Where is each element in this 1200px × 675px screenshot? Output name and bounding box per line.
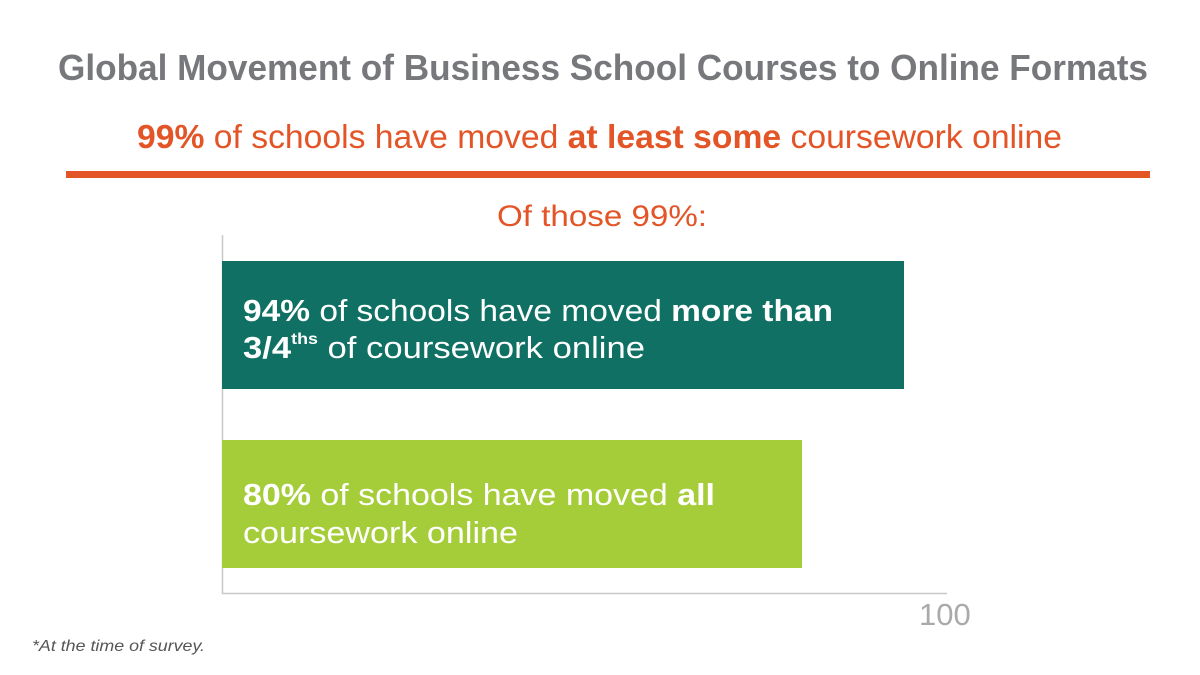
subheading: Of those 99%: [497, 200, 707, 233]
bar: 80%: coursework online [243, 515, 518, 550]
bar: 94%: 3/4 [243, 330, 292, 365]
bar chart [222, 235, 971, 632]
bar: 94% [222, 261, 904, 389]
axis label: 100 [919, 597, 971, 632]
orange divider [66, 171, 1150, 178]
bar: 94%: 94% of schools have moved more than [243, 293, 833, 328]
bar: 80%: 80% of schools have moved all [243, 477, 715, 512]
title: Global Movement of Business School Courses to Online Formats [58, 47, 1148, 88]
subtitle: 99% of schools have moved at least some coursework online [137, 118, 1062, 155]
bar: 94%: of coursework online [318, 330, 645, 365]
bar: 94%: ths [291, 331, 318, 348]
bar: 80% [222, 440, 802, 568]
footnote: *At the time of survey. [32, 638, 205, 655]
